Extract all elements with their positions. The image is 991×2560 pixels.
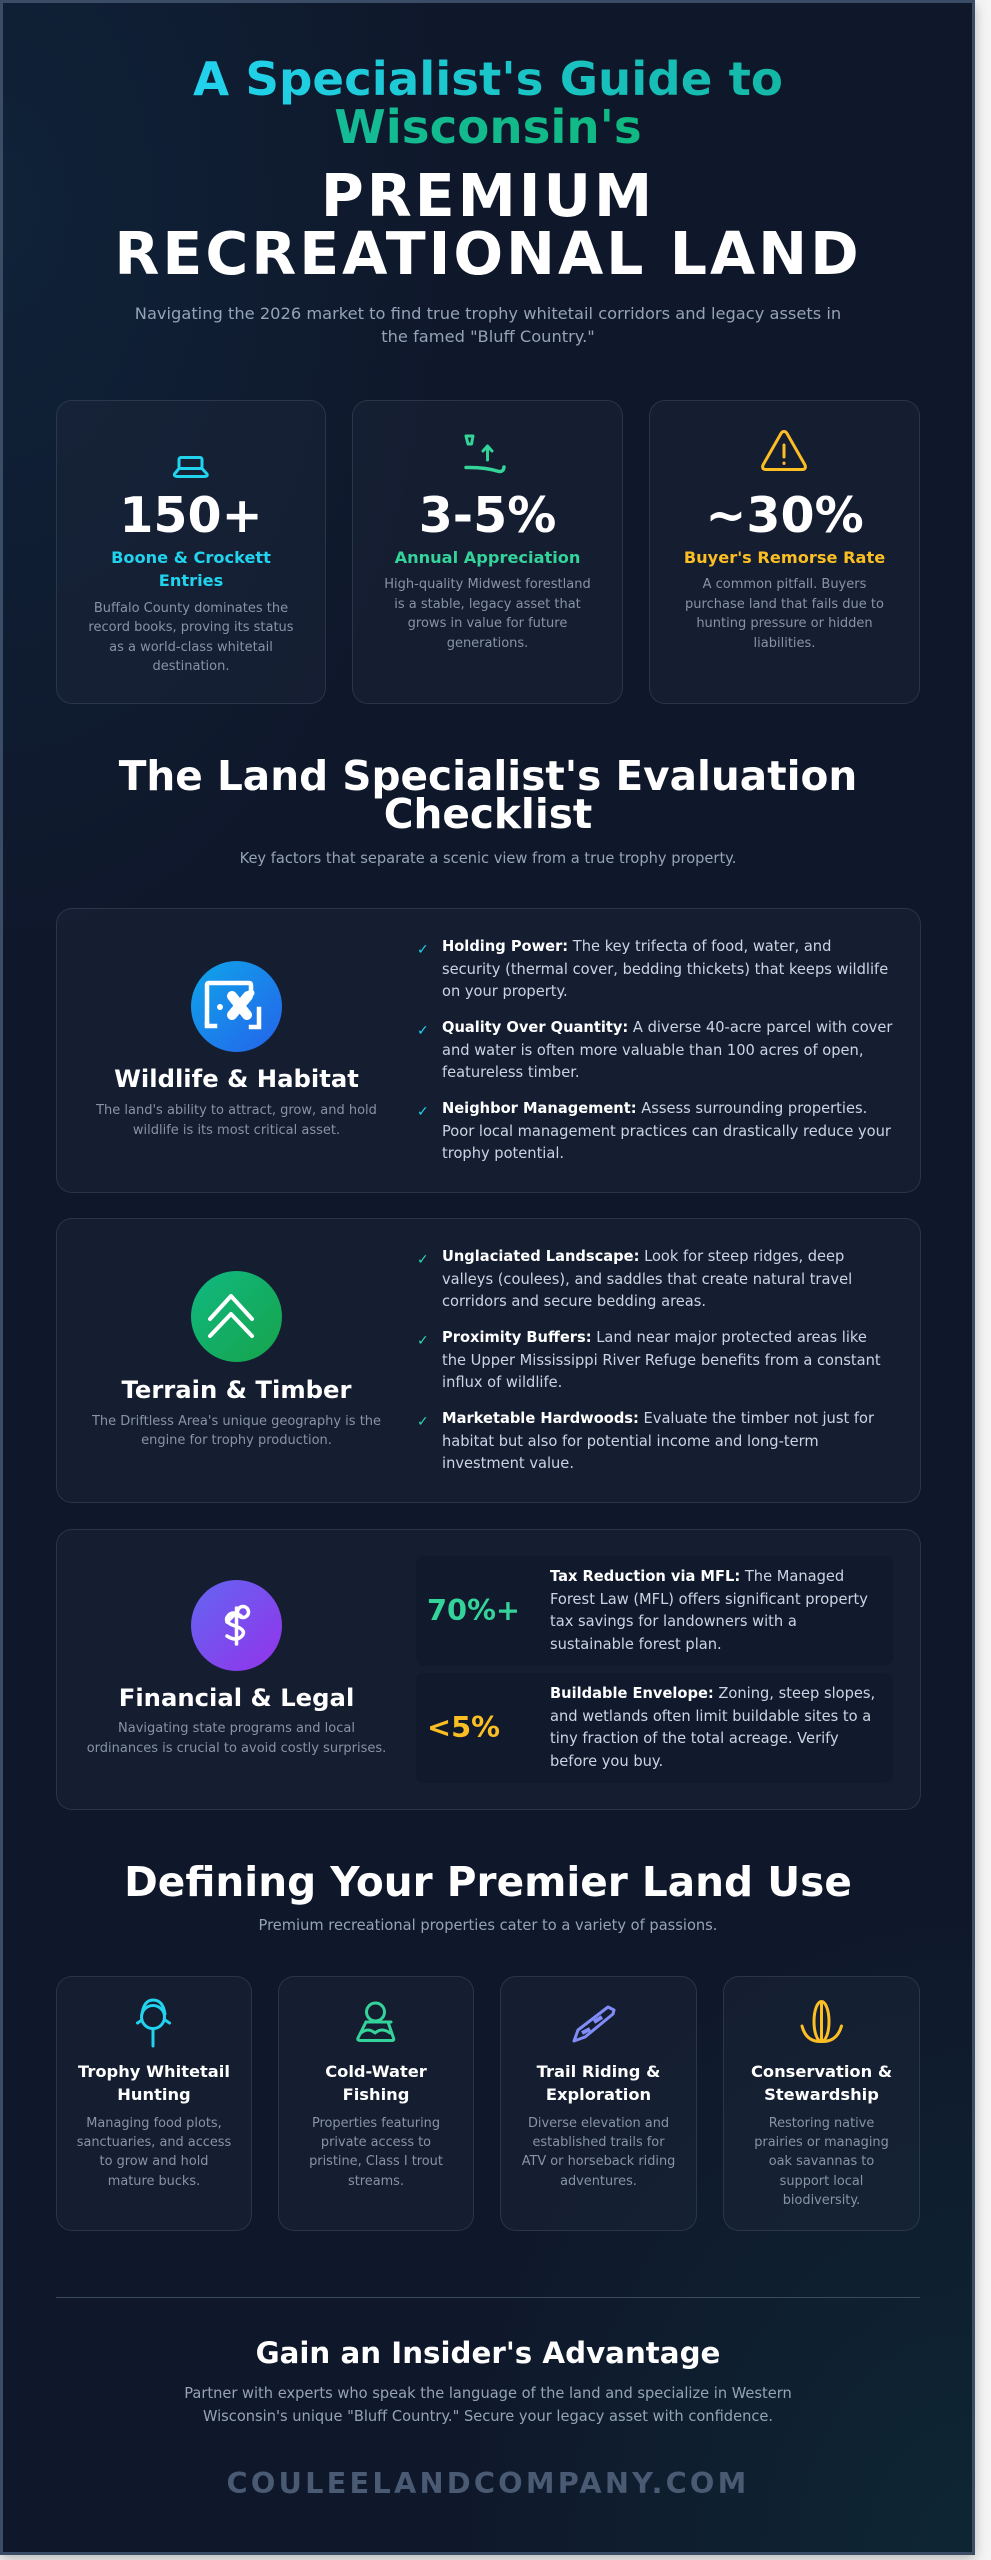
item: holding power: on your property. <box>442 983 568 1000</box>
call to action text: Wisconsin's unique "Bluff Country." Secure your legacy asset with confidence. <box>203 2408 773 2425</box>
icon: growth arrow <box>464 434 506 474</box>
section subtitle: Premium recreational properties cater to a variety of passions. <box>259 1917 717 1934</box>
card description: established trails for <box>532 2135 664 2150</box>
divider <box>56 2297 920 2298</box>
description: High-quality Midwest forestland <box>384 577 591 592</box>
check 2: ✓ <box>417 1023 429 1039</box>
card description: to grow and hold <box>100 2154 208 2169</box>
label: boone and crockett <box>111 548 271 590</box>
panel description: Navigating state programs and local <box>118 1721 355 1736</box>
card description: biodiversity. <box>783 2193 860 2208</box>
panel description: engine for trophy production. <box>141 1433 332 1448</box>
stat: ~30%: ~30% <box>705 487 864 544</box>
panel: stat card 2 <box>352 400 623 704</box>
checklist <box>417 938 892 1162</box>
panel description <box>92 1414 381 1448</box>
item: marketable hardwoods: habitat but also for potential income and long-term <box>442 1433 819 1450</box>
panel: stat card 1 <box>56 400 326 704</box>
check 3: ✓ <box>417 1104 429 1120</box>
title: Wisconsin's <box>334 101 642 155</box>
card description <box>309 2116 443 2189</box>
icon: dollar <box>191 1580 282 1671</box>
card title: Hunting <box>117 2085 191 2104</box>
stat: 150+: 150+ <box>119 487 263 544</box>
item: neighbor management: trophy potential. <box>442 1145 564 1162</box>
text: buildable envelope: tiny fraction of the total acreage. Verify <box>550 1730 839 1747</box>
icon: warning triangle <box>761 430 807 471</box>
panel: trail riding and exploration <box>500 1976 697 2231</box>
item: unglaciated landscape: Unglaciated Landscape: Look for steep ridges, deep <box>442 1248 844 1265</box>
stat: 3-5%: 3-5% <box>419 487 556 544</box>
subtitle: Navigating the 2026 market to find true trophy whitetail corridors and legacy assets in <box>135 304 841 323</box>
text: tax reduction via mfl: Forest Law (MFL) offers significant property <box>550 1591 868 1608</box>
description: generations. <box>447 636 528 651</box>
card title: Cold-Water <box>325 2062 427 2081</box>
item: marketable hardwoods: Marketable Hardwoods: Evaluate the timber not just for <box>442 1410 874 1427</box>
panel title: Financial & Legal <box>119 1683 354 1712</box>
description: is a stable, legacy asset that <box>394 597 581 612</box>
description: hunting pressure or hidden <box>696 616 873 631</box>
item: marketable hardwoods: investment value. <box>442 1455 574 1472</box>
label: annual appreciation: Annual Appreciation <box>395 548 580 567</box>
icon: terrain chevrons <box>191 1271 282 1362</box>
panel: stat card 3 <box>649 400 920 704</box>
card description: Properties featuring <box>312 2116 440 2130</box>
panel description: The land's ability to attract, grow, and hold <box>96 1103 377 1118</box>
item: proximity buffers: Proximity Buffers: Land near major protected areas like <box>442 1329 867 1346</box>
label: boone and crockett: Boone & Crockett <box>111 548 271 567</box>
description <box>685 577 884 651</box>
card description: Restoring native <box>769 2116 874 2130</box>
card description: oak savannas to <box>769 2154 874 2169</box>
item: neighbor management: Neighbor Management: Assess surrounding properties. <box>442 1100 867 1117</box>
title: A Specialist's Guide to <box>193 53 783 107</box>
title: premium recreational land <box>114 162 862 288</box>
item: marketable hardwoods <box>442 1410 874 1472</box>
panel description: ordinances is crucial to avoid costly surprises. <box>87 1741 386 1756</box>
item: neighbor management <box>442 1100 891 1162</box>
item: quality over quantity <box>442 1019 892 1081</box>
item: holding power <box>442 938 888 1000</box>
item: holding power: security (thermal cover, bedding thickets) that keeps wildlife <box>442 961 888 978</box>
description: record books, proving its status <box>88 620 294 635</box>
card title: Exploration <box>546 2085 651 2104</box>
check 2: ✓ <box>417 1333 429 1349</box>
subtitle: the famed "Bluff Country." <box>381 327 595 346</box>
icon: trail marker <box>572 2006 616 2042</box>
card title: Trophy Whitetail <box>78 2062 230 2081</box>
text: tax reduction via mfl: tax savings for landowners with a <box>550 1613 797 1630</box>
callout: tax reduction <box>416 1556 893 1666</box>
panel: financial and legal <box>56 1529 920 1810</box>
card description: mature bucks. <box>108 2174 200 2189</box>
heading: evaluation checklist <box>118 752 857 838</box>
text: buildable envelope: Buildable Envelope: Zoning, steep slopes, <box>550 1685 875 1702</box>
card description <box>522 2116 675 2189</box>
item: holding power: Holding Power: The key trifecta of food, water, and <box>442 938 831 955</box>
item: quality over quantity: featureless timber. <box>442 1064 580 1081</box>
card description: ATV or horseback riding <box>522 2154 675 2169</box>
icon: laptop <box>172 456 209 478</box>
card title <box>78 2062 230 2104</box>
call to action text <box>184 2385 792 2425</box>
text: tax reduction via mfl <box>550 1568 868 1653</box>
card description: sanctuaries, and access <box>77 2135 231 2150</box>
check 3: ✓ <box>417 1414 429 1430</box>
card description: streams. <box>348 2174 404 2189</box>
panel: cold-water fishing <box>278 1976 474 2231</box>
text: tax reduction via mfl: sustainable forest plan. <box>550 1636 722 1653</box>
callout: buildable envelope <box>416 1673 893 1783</box>
card title: Stewardship <box>764 2085 879 2104</box>
card description: adventures. <box>560 2174 637 2189</box>
heading: premier land use: Defining Your Premier Land Use <box>124 1858 852 1906</box>
heading: evaluation checklist: The Land Specialist's Evaluation <box>119 752 857 800</box>
card description <box>754 2116 889 2208</box>
description: destination. <box>152 659 229 674</box>
title: premium recreational land: PREMIUM <box>321 162 655 230</box>
card title <box>536 2062 660 2104</box>
item: quality over quantity: Quality Over Quantity: A diverse 40-acre parcel with cover <box>442 1019 892 1036</box>
panel description: wildlife is its most critical asset. <box>133 1123 340 1138</box>
item: proximity buffers: influx of wildlife. <box>442 1374 562 1391</box>
description: purchase land that fails due to <box>685 597 884 612</box>
checklist <box>417 1248 881 1472</box>
card title: Conservation & <box>751 2062 892 2081</box>
stat: <5%: <5% <box>427 1710 500 1744</box>
label: buyer's remorse rate: Buyer's Remorse Rate <box>684 548 885 567</box>
panel description <box>96 1103 377 1138</box>
heading: evaluation checklist: Checklist <box>384 790 592 838</box>
panel description <box>87 1721 386 1756</box>
text: tax reduction via mfl: Tax Reduction via MFL: The Managed <box>550 1568 844 1585</box>
card description: Managing food plots, <box>86 2116 222 2130</box>
card description: prairies or managing <box>754 2135 889 2150</box>
description: as a world-class whitetail <box>109 640 273 655</box>
item: unglaciated landscape <box>442 1248 852 1310</box>
item: neighbor management: Poor local management practices can drastically reduce your <box>442 1123 891 1140</box>
panel title: Wildlife & Habitat <box>114 1064 359 1092</box>
check 1: ✓ <box>417 1252 429 1268</box>
text: buildable envelope <box>550 1685 875 1770</box>
icon: wheat <box>800 2000 843 2043</box>
label: boone and crockett: Entries <box>159 571 223 590</box>
description: grows in value for future <box>408 616 567 631</box>
card description: support local <box>780 2174 863 2189</box>
item: proximity buffers <box>442 1329 881 1391</box>
icon: wildlife <box>191 961 282 1052</box>
card description: Diverse elevation and <box>528 2116 669 2130</box>
card title <box>751 2062 892 2104</box>
item: unglaciated landscape: valleys (coulees), and saddles that create natural travel <box>442 1271 852 1288</box>
description: A common pitfall. Buyers <box>703 577 866 592</box>
title: premium recreational land: RECREATIONAL LAND <box>114 220 862 288</box>
subtitle <box>135 304 841 346</box>
check 1: ✓ <box>417 942 429 958</box>
heading: call to action: Gain an Insider's Advantage <box>256 2336 720 2370</box>
description <box>88 600 294 674</box>
item: unglaciated landscape: corridors and secure bedding areas. <box>442 1293 706 1310</box>
text: buildable envelope: and wetlands often limit buildable sites to a <box>550 1708 871 1725</box>
card title: Fishing <box>343 2085 409 2104</box>
card title <box>325 2062 427 2104</box>
text: buildable envelope: before you buy. <box>550 1753 663 1770</box>
item: proximity buffers: the Upper Mississippi River Refuge benefits from a constant <box>442 1352 881 1369</box>
panel description: The Driftless Area's unique geography is the <box>92 1414 381 1428</box>
stat: 70%+: 70%+ <box>427 1593 520 1627</box>
description <box>384 577 591 651</box>
card description <box>77 2116 231 2189</box>
icon: fishing <box>356 2002 396 2042</box>
website footer: COULEELANDCOMPANY.COM <box>227 2466 749 2500</box>
call to action text: Partner with experts who speak the language of the land and specialize in Western <box>184 2385 792 2402</box>
panel: conservation and stewardship <box>723 1976 920 2231</box>
panel: terrain and timber <box>56 1218 920 1503</box>
card description: private access to <box>321 2135 431 2150</box>
section subtitle: Key factors that separate a scenic view from a true trophy property. <box>240 850 736 867</box>
panel: wildlife and habitat <box>56 908 920 1193</box>
title <box>193 53 783 155</box>
card title: Trail Riding & <box>537 2062 660 2081</box>
description: liabilities. <box>754 636 815 651</box>
item: quality over quantity: and water is often more valuable than 100 acres of open, <box>442 1042 864 1059</box>
description: Buffalo County dominates the <box>94 600 288 616</box>
panel: trophy whitetail hunting <box>56 1976 252 2231</box>
icon: deer target <box>136 1998 172 2048</box>
panel title: Terrain & Timber <box>122 1374 352 1404</box>
card description: pristine, Class I trout <box>309 2154 443 2169</box>
